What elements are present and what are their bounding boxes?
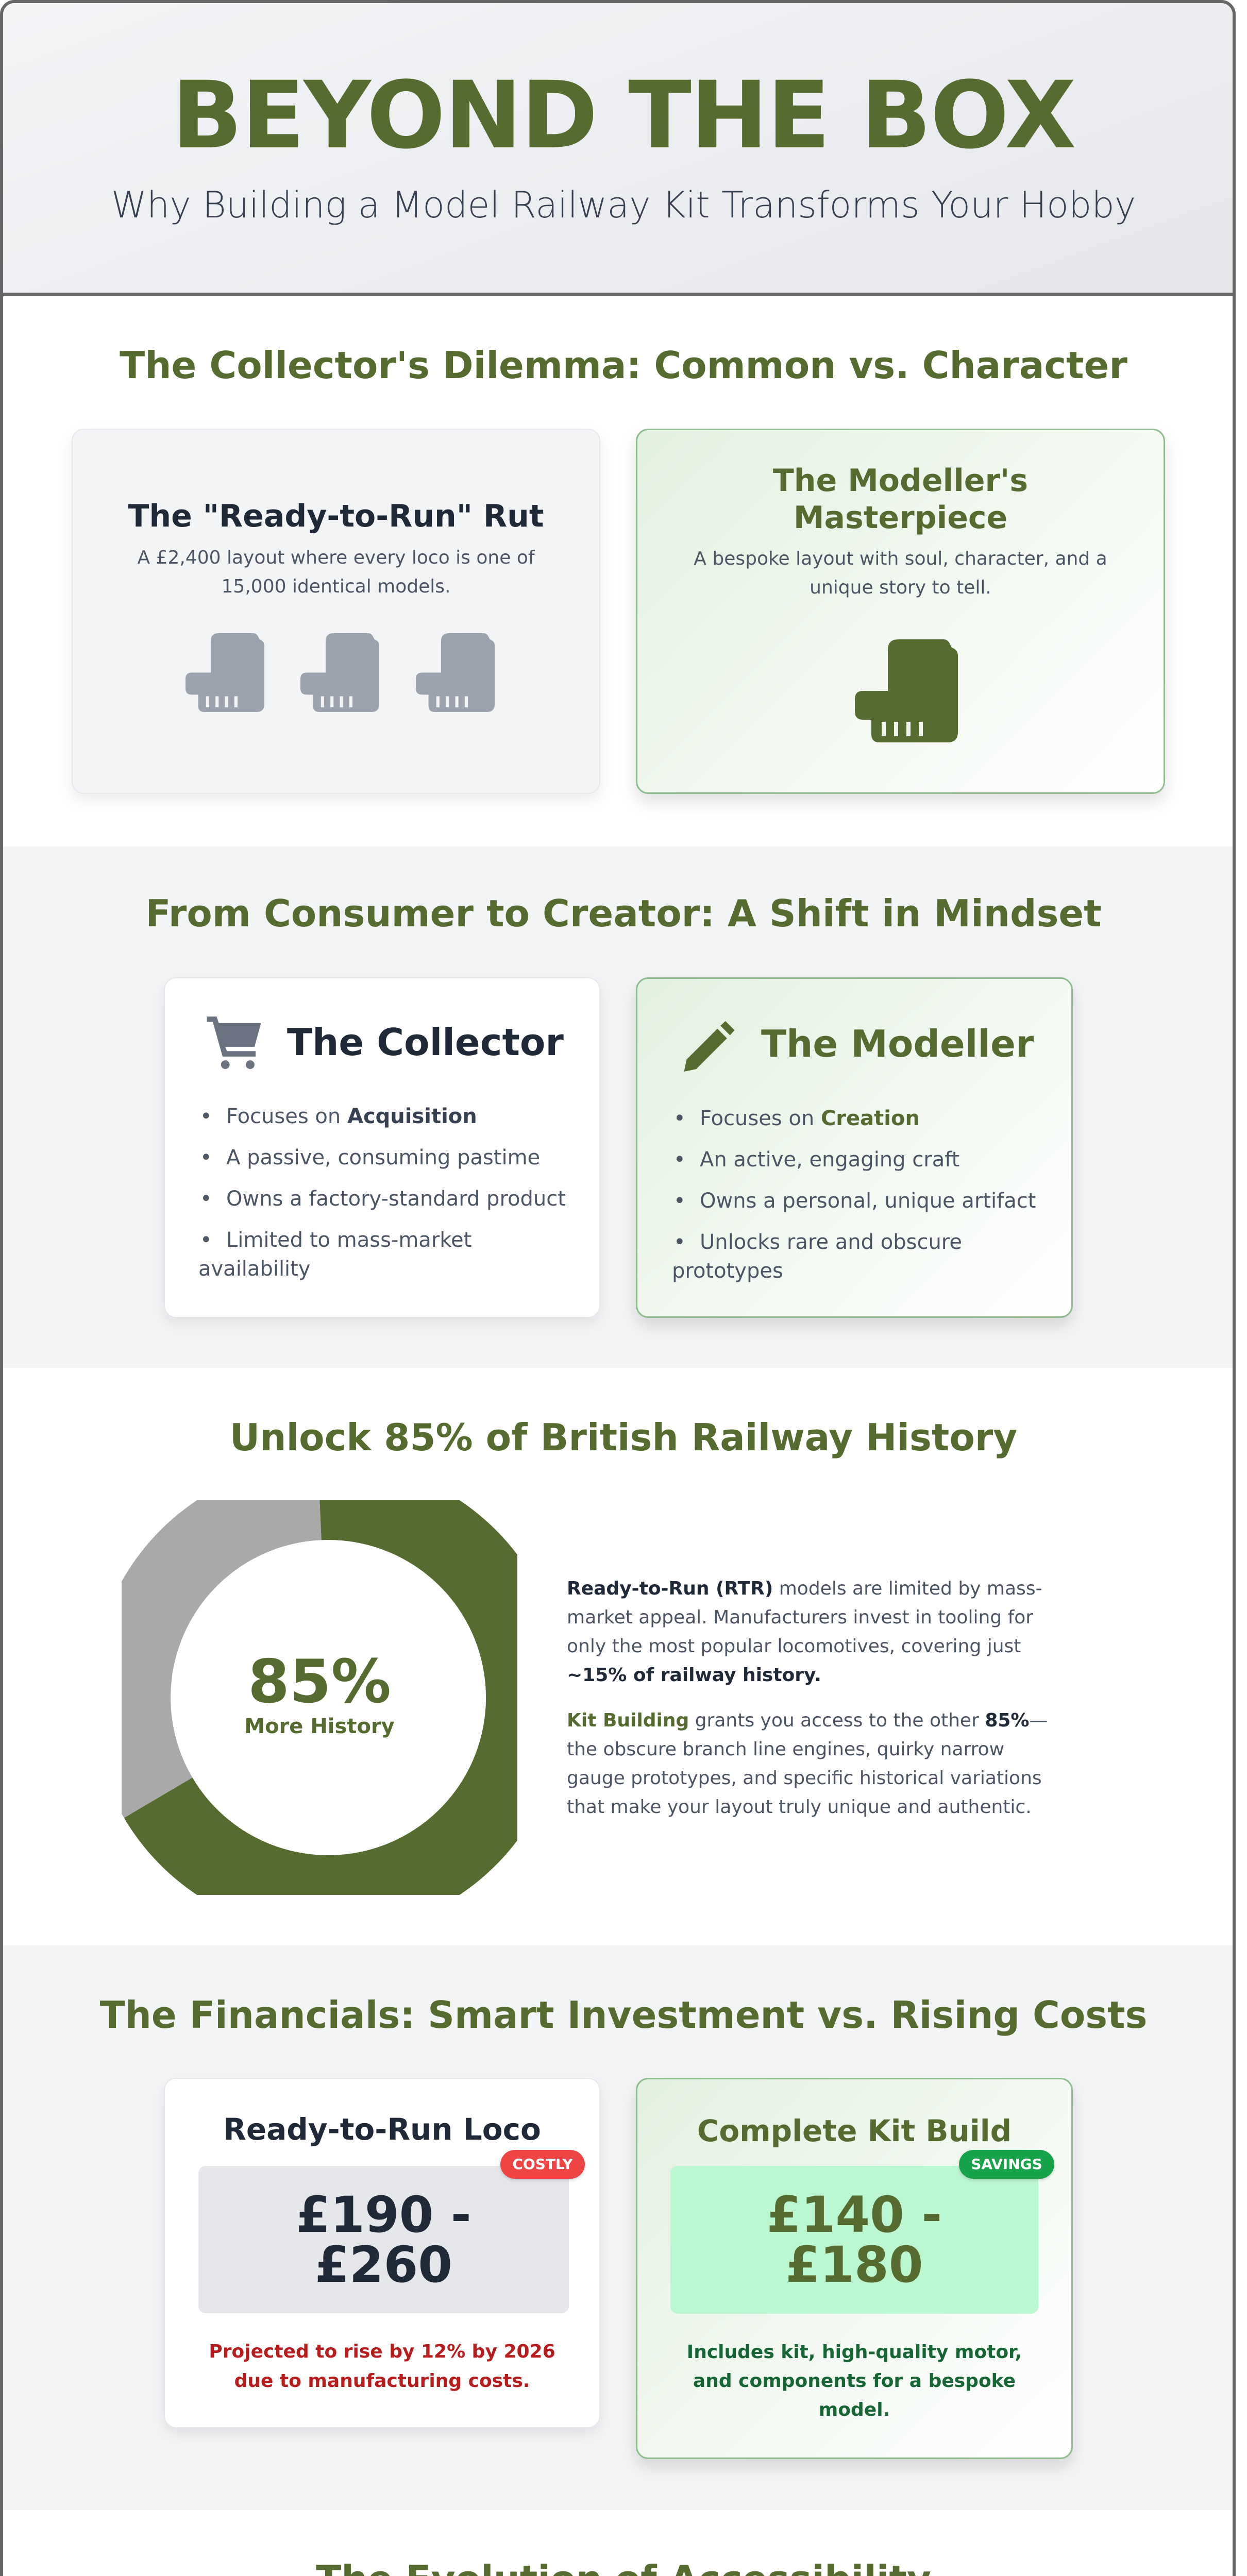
icon: cart: [207, 1016, 261, 1069]
bullet list: Unlocks rare and obscure: [700, 1230, 962, 1254]
card text: A bespoke layout with soul, character, and a: [694, 548, 1107, 569]
card heading: The Modeller's: [773, 463, 1028, 499]
note: [687, 2342, 1022, 2420]
bullet list: prototypes: [672, 1259, 783, 1283]
badge: savings: [959, 2150, 1054, 2179]
header: [0, 0, 1247, 293]
card text: A £2,400 layout where every loco is one of: [137, 547, 535, 568]
card text: 15,000 identical models.: [222, 576, 450, 597]
price box: £260: [315, 2236, 452, 2294]
price box: £140 -: [767, 2186, 942, 2244]
bullet list: Owns a factory-standard product: [226, 1187, 566, 1211]
card text: [137, 547, 535, 597]
note: model.: [819, 2399, 890, 2420]
note: [209, 2341, 555, 2392]
card heading: [773, 463, 1028, 536]
bullet list: availability: [198, 1257, 311, 1281]
chart: donut: More History: [244, 1715, 395, 1738]
heading: Unlock 85% of British Railway History: [230, 1416, 1017, 1459]
bullet list: Limited to mass-market: [226, 1228, 471, 1252]
chart: donut: [122, 1500, 517, 1895]
bullet list: •: [200, 1146, 212, 1170]
text block: explanation: that make your layout truly unique and authentic.: [567, 1797, 1032, 1818]
card heading: The "Ready-to-Run" Rut: [128, 498, 544, 534]
bullet list: •: [673, 1189, 686, 1213]
text block: explanation: Ready-to-Run (RTR) models are limited by mass-: [567, 1578, 1042, 1599]
text block: explanation: gauge prototypes, and specific historical variations: [567, 1768, 1042, 1789]
price box: [198, 2166, 569, 2313]
bullet list: A passive, consuming pastime: [226, 1146, 540, 1170]
subtitle: Why Building a Model Railway Kit Transforms Your Hobby: [111, 184, 1136, 226]
card text: unique story to tell.: [810, 577, 991, 598]
price box: £190 -: [296, 2186, 471, 2244]
icon: pencil: [684, 1021, 735, 1072]
badge: costly: COSTLY: [512, 2156, 573, 2173]
title: BEYOND THE BOX: [172, 62, 1075, 170]
bullet list: [198, 1105, 566, 1281]
note: Includes kit, high-quality motor,: [687, 2342, 1022, 2363]
badge: savings: SAVINGS: [971, 2156, 1042, 2173]
bullet list: •: [200, 1228, 212, 1252]
price box: [670, 2166, 1038, 2314]
text block: explanation: the obscure branch line engines, quirky narrow: [567, 1739, 1004, 1760]
section: evolution: [0, 2510, 1247, 2576]
section: financials: [0, 1945, 1247, 2510]
card heading: Ready-to-Run Loco: [223, 2112, 541, 2147]
panel: the collector: [164, 977, 600, 1318]
card heading: The Collector: [287, 1021, 564, 1064]
panel: modeller's masterpiece: [636, 429, 1165, 794]
text block: explanation: ~15% of railway history.: [567, 1665, 821, 1686]
bullet list: •: [200, 1187, 212, 1211]
panel: the modeller: [636, 977, 1073, 1318]
note: due to manufacturing costs.: [234, 2370, 530, 2392]
panel: RTR price: [164, 2078, 600, 2428]
card heading: Complete Kit Build: [697, 2113, 1012, 2148]
text block: explanation: only the most popular locomotives, covering just: [567, 1636, 1021, 1657]
donut label: 85%: [248, 1647, 391, 1717]
section: consumer to creator: [0, 846, 1247, 1368]
bullet list: Owns a personal, unique artifact: [700, 1189, 1036, 1213]
section: collector's dilemma: [0, 296, 1247, 846]
bullet list: Focuses on Acquisition: [226, 1105, 477, 1128]
bullet list: •: [673, 1107, 686, 1130]
card heading: The Modeller: [761, 1022, 1034, 1065]
bullet list: [672, 1107, 1036, 1283]
badge: costly: [500, 2150, 585, 2179]
bullet list: •: [673, 1148, 686, 1172]
note: Projected to rise by 12% by 2026: [209, 2341, 555, 2362]
bullet list: Focuses on Creation: [700, 1107, 920, 1130]
icons: identical locos: [186, 633, 495, 712]
heading: The Collector's Dilemma: Common vs. Character: [120, 344, 1127, 387]
bullet list: •: [673, 1230, 686, 1254]
heading: From Consumer to Creator: A Shift in Mindset: [145, 892, 1102, 935]
icon: unique loco: [855, 639, 958, 742]
panel: ready-to-run rut: [72, 429, 600, 794]
text block: explanation: [567, 1578, 1048, 1818]
text block: explanation: market appeal. Manufacturers invest in tooling for: [567, 1607, 1033, 1628]
card heading: Masterpiece: [794, 500, 1007, 536]
price box: £180: [785, 2236, 923, 2294]
heading: The Financials: Smart Investment vs. Rising Costs: [100, 1993, 1147, 2037]
section: unlock 85%: [0, 1368, 1247, 1945]
text block: explanation: Kit Building grants you access to the other 85%—: [567, 1710, 1048, 1731]
card text: [694, 548, 1107, 598]
bullet list: •: [200, 1105, 212, 1128]
bullet list: An active, engaging craft: [700, 1148, 959, 1172]
panel: kit price: [636, 2078, 1073, 2459]
note: and components for a bespoke: [693, 2370, 1016, 2392]
